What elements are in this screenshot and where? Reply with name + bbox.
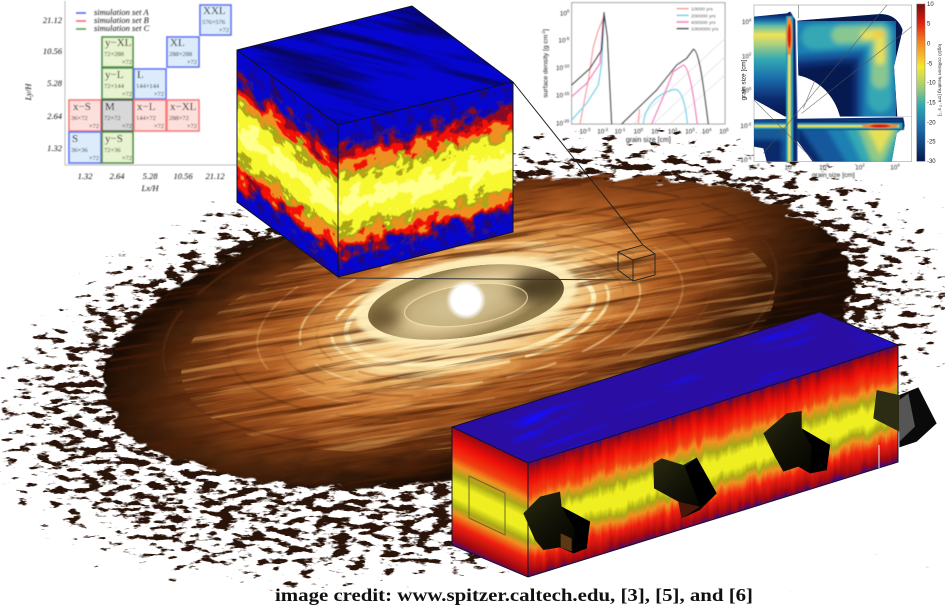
colorbar: -5: [927, 61, 933, 67]
x axis ticks and label: 3: [692, 127, 695, 132]
x axis ticks and label: -2: [604, 127, 609, 132]
box y-L: [102, 68, 133, 99]
box L: ×72: [154, 91, 164, 98]
y axis labels: 10.56: [43, 46, 63, 56]
y axis ticks and label: 10: [560, 10, 567, 17]
box y-L: y−L: [105, 69, 124, 81]
collision heatmap: [740, 2, 943, 179]
x axis ticks and label: 10: [668, 129, 675, 136]
box M: M: [105, 101, 115, 113]
box y-L: 72×144: [104, 83, 125, 90]
box XXL: 576×576: [202, 19, 226, 26]
x axis labels: 21.12: [205, 171, 225, 181]
legend: 400000 yrs: [691, 20, 716, 26]
y axis ticks and label: [541, 9, 570, 127]
x axis ticks and label: 10: [615, 129, 622, 136]
y axis labels: 2.64: [47, 111, 63, 121]
horizontal ridge: [754, 121, 904, 130]
inner ring: [402, 277, 530, 333]
axis ticks: 10: [740, 123, 747, 130]
box left face: [452, 428, 528, 576]
central star: [446, 280, 486, 320]
box x-L: [134, 100, 166, 131]
x axis: 10: [819, 164, 826, 171]
plot frame: [572, 3, 725, 124]
x axis labels: Lx/H: [140, 183, 159, 193]
disk spiral streaks: [107, 177, 850, 486]
axis ticks: 10: [742, 88, 749, 95]
image credit caption: image credit: www.spitzer.caltech.edu, [3], [5], and [6]: [275, 585, 753, 605]
box x-S: ×72: [89, 123, 99, 130]
axis ticks: 10: [740, 157, 747, 164]
colorbar: -20: [927, 120, 936, 126]
x axis ticks and label: 10: [634, 129, 641, 136]
box x-S: [69, 100, 101, 131]
lower lobe: [754, 117, 905, 162]
y axis ticks and label: 10: [558, 38, 565, 45]
x axis: 10: [749, 164, 756, 171]
x axis ticks and label: -1: [622, 127, 626, 132]
box x-XL: [167, 100, 199, 131]
box y-L: ×72: [122, 91, 132, 98]
legend: [677, 7, 719, 33]
block 2: [653, 458, 717, 518]
box x-L: x−L: [137, 101, 156, 113]
box XXL: XXL: [203, 5, 226, 17]
box y-XL: ×72: [122, 59, 132, 66]
legend: 200000 yrs: [691, 13, 716, 19]
box top face: [454, 312, 896, 462]
box XL: 288×288: [169, 51, 192, 58]
box XL: ×72: [187, 59, 197, 66]
x axis: 10: [855, 164, 862, 171]
colorbar: 10: [927, 2, 934, 8]
y axis labels: [23, 15, 63, 153]
box M: 72×72: [104, 115, 121, 122]
cube edges: [237, 6, 513, 277]
x axis ticks and label: 10: [685, 129, 692, 136]
colorbar: -15: [927, 100, 936, 106]
y axis ticks and label: ]: [542, 29, 549, 31]
box M: [102, 100, 133, 131]
plot frame: [65, 1, 237, 165]
legend: simulation set A: [94, 7, 149, 17]
guide lines: [633, 38, 725, 124]
cube right face: [338, 82, 512, 276]
disk body: [82, 130, 874, 534]
x axis ticks and label: 2: [675, 127, 678, 132]
x axis: -2: [792, 163, 796, 168]
long simulation box: [452, 312, 898, 578]
curves: [572, 13, 708, 124]
y axis ticks and label: -15: [563, 91, 570, 96]
x axis ticks and label: 10: [597, 129, 604, 136]
small location cube on disk: [618, 245, 655, 281]
box S: [69, 132, 101, 163]
colorbar: -25: [927, 140, 936, 146]
upper right lobe: [797, 14, 903, 117]
y axis ticks and label: 0: [567, 9, 570, 14]
box x-XL: ×72: [187, 123, 197, 130]
x axis: 10: [890, 164, 897, 171]
y axis labels: Ly/H: [23, 83, 33, 101]
box edges: [452, 312, 898, 577]
x axis: 4: [897, 163, 900, 168]
axis ticks: 10: [742, 19, 749, 26]
cube top face: [238, 6, 512, 124]
axis ticks: -2: [747, 121, 752, 126]
box x-S: x−S: [73, 101, 91, 113]
y axis ticks and label: 10: [556, 65, 563, 72]
x axis ticks and label: [580, 127, 729, 144]
axis ticks: [740, 17, 752, 164]
box S: S: [72, 133, 78, 145]
block 3: [763, 411, 830, 473]
colorbar: [917, 2, 943, 165]
x axis: -4: [756, 163, 760, 168]
legend: simulation set B: [94, 15, 149, 25]
box y-S: [102, 132, 133, 163]
x axis ticks and label: 5: [726, 127, 729, 132]
box x-XL: 288×72: [169, 115, 189, 122]
x axis ticks and label: grain size [cm]: [626, 137, 671, 144]
box L: L: [137, 69, 144, 81]
axis ticks: 10: [742, 53, 749, 60]
x axis ticks and label: 10: [651, 129, 658, 136]
x axis labels: 1.32: [78, 171, 93, 181]
box XL: [167, 37, 199, 67]
x axis labels: 5.28: [143, 171, 158, 181]
x axis: [749, 163, 900, 179]
simulation set grid chart: [23, 1, 237, 193]
y axis ticks and label: 10: [556, 120, 563, 127]
x axis ticks and label: 4: [709, 127, 712, 132]
inner bright ring: [349, 242, 583, 360]
box S: 36×36: [71, 147, 88, 154]
surface density line chart: [541, 3, 729, 144]
x axis ticks and label: -3: [587, 127, 591, 132]
box y-S: y−S: [105, 133, 123, 145]
vertical ridge: [786, 11, 797, 162]
y axis ticks and label: -5: [565, 36, 570, 41]
box y-S: 72×36: [104, 147, 121, 154]
legend: 1000000 yrs: [691, 27, 719, 33]
axis ticks: 0: [749, 86, 752, 91]
box x-S: 36×72: [71, 115, 88, 122]
upper left lobe: [754, 12, 795, 117]
legend: 10000 yrs: [691, 7, 713, 13]
block 1: [523, 492, 590, 553]
box y-XL: [102, 37, 133, 67]
axis ticks: 2: [749, 52, 752, 57]
heat field: [750, 3, 912, 165]
y axis labels: 21.12: [43, 15, 63, 25]
y axis ticks and label: surface density [g cm: [542, 35, 549, 98]
x axis ticks and label: 0: [641, 127, 644, 132]
x axis: 10: [785, 164, 792, 171]
dark gap shadow left: [362, 303, 402, 333]
box XL: XL: [170, 37, 185, 49]
plot frame: [754, 5, 912, 162]
colorbar: -10: [927, 80, 936, 86]
zoom pointer lines: [338, 82, 643, 280]
box x-XL: x−XL: [170, 101, 197, 113]
x axis ticks and label: 10: [719, 129, 726, 136]
axis ticks: -4: [747, 155, 752, 160]
x axis ticks and label: 1: [658, 127, 661, 132]
box y-XL: 72×288: [104, 51, 124, 58]
colorbar: -30: [927, 159, 936, 165]
y axis ticks and label: 10: [556, 93, 563, 100]
speckled outer dust cloud: [0, 130, 945, 600]
dark extruded blocks on long box: [523, 387, 937, 553]
y axis ticks and label: -2: [541, 30, 546, 35]
legend: simulation set C: [94, 23, 150, 33]
box XXL: ×72: [219, 27, 229, 34]
box L: [134, 69, 166, 99]
box M: ×72: [122, 123, 132, 130]
y axis labels: 5.28: [47, 78, 63, 88]
box x-L: 144×72: [136, 115, 156, 122]
box S: ×72: [89, 155, 99, 162]
inner gap: [368, 264, 564, 340]
box y-S: ×72: [122, 155, 132, 162]
x axis: 0: [826, 163, 829, 168]
box x-L: ×72: [154, 123, 164, 130]
guide lines: [754, 3, 912, 162]
legend: [76, 7, 150, 33]
box XXL: [200, 5, 231, 35]
box long face: [528, 346, 898, 576]
dark gap shadow right: [509, 266, 573, 306]
x axis labels: 2.64: [110, 171, 125, 181]
x axis: 2: [862, 163, 865, 168]
colorbar: 0: [927, 41, 931, 47]
axis ticks: 4: [749, 17, 752, 22]
block 4: [873, 387, 937, 447]
embedded square outline: [469, 476, 505, 535]
x axis ticks and label: 10: [580, 129, 587, 136]
colorbar: log10 collision heating [cm⁻³ s⁻¹]: [937, 44, 943, 117]
x axis ticks and label: 10: [702, 129, 709, 136]
x axis labels: [78, 171, 225, 193]
x axis: grain size [cm]: [812, 172, 855, 179]
x axis labels: 10.56: [173, 171, 193, 181]
y axis ticks and label: -10: [563, 63, 570, 68]
y axis ticks and label: -20: [563, 119, 570, 124]
protoplanetary disk: [102, 174, 857, 492]
large simulation cube: [236, 6, 514, 278]
cube left face: [238, 51, 338, 276]
box y-XL: y−XL: [105, 37, 132, 49]
y axis label: grain size [cm]: [740, 59, 747, 100]
colorbar: 5: [927, 21, 931, 27]
y axis labels: 1.32: [47, 143, 63, 153]
box L: 144×144: [136, 83, 160, 90]
